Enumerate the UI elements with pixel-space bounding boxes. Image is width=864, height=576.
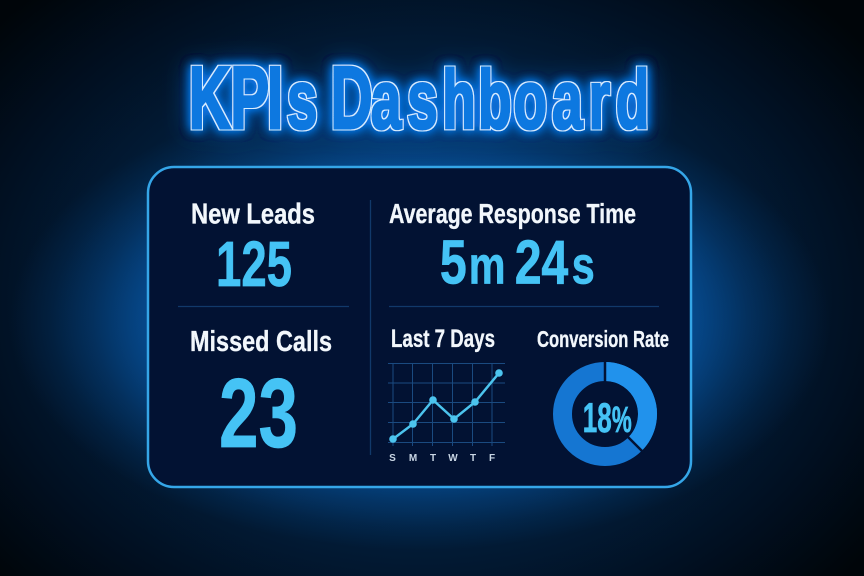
- title: [189, 49, 649, 147]
- average response time value: 24: [515, 228, 568, 297]
- chart day labels: [389, 453, 495, 464]
- panel: KPI card: [148, 167, 691, 487]
- average response time label: Average Response Time: [389, 198, 636, 229]
- donut percent: %: [612, 401, 632, 440]
- title: D: [331, 49, 373, 147]
- donut chart: [562, 360, 648, 456]
- average response time value: 5: [440, 228, 467, 297]
- conversion rate label: Conversion Rate: [537, 326, 669, 352]
- donut percent: 18: [583, 395, 612, 442]
- missed calls label: Missed Calls: [190, 326, 332, 358]
- new leads value: 125: [216, 228, 292, 300]
- chart day labels: S: [389, 453, 396, 464]
- chart day labels: W: [448, 453, 458, 464]
- chart day labels: F: [489, 453, 495, 464]
- title: s: [287, 52, 333, 146]
- line chart: [388, 363, 505, 464]
- title: KPI: [189, 49, 283, 147]
- missed calls value: 23: [219, 358, 298, 468]
- chart day labels: T: [430, 453, 436, 464]
- chart day labels: M: [409, 453, 417, 464]
- chart day labels: T: [470, 453, 476, 464]
- title: ashboard: [371, 52, 649, 146]
- average response time value: s: [572, 237, 595, 296]
- new leads label: New Leads: [191, 198, 315, 230]
- last 7 days label: Last 7 Days: [391, 325, 495, 353]
- average response time value: m: [469, 237, 517, 296]
